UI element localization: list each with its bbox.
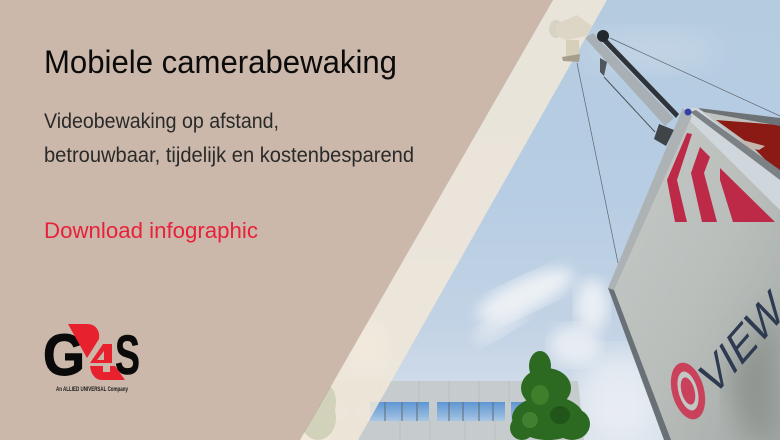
subtitle: Videobewaking op afstand, (44, 110, 279, 133)
red mark (68, 324, 99, 358)
silver top rail (683, 108, 780, 210)
clouds (474, 36, 698, 438)
chevrons (667, 133, 775, 222)
logo: G4S (43, 323, 140, 393)
trailer body (608, 108, 780, 440)
logo: G4S: G (43, 323, 85, 388)
title: Mobiele camerabewaking (44, 44, 397, 80)
@VIEW trailer lettering (670, 288, 780, 420)
building (358, 381, 584, 440)
logo numeral: 4 (104, 358, 108, 364)
mast (585, 30, 679, 146)
logo tagline: An ALLIED UNIVERSAL Company (56, 387, 128, 393)
translucent cream band (300, 0, 607, 440)
@VIEW trailer lettering: @ (682, 381, 692, 400)
photo: mobile camera trailer against the sky (290, 0, 780, 440)
top red face (716, 120, 780, 175)
tree left (304, 387, 336, 440)
beige panel (0, 0, 553, 440)
guy wires (577, 38, 780, 263)
subtitle: betrouwbaar, tijdelijk en kostenbesparend (44, 144, 414, 167)
logo: G4S: S (115, 323, 140, 386)
download link: Download infographic (44, 218, 258, 243)
camera (549, 15, 592, 62)
panel reflection (725, 300, 780, 440)
subtitle (44, 110, 414, 167)
tree right (510, 351, 590, 440)
